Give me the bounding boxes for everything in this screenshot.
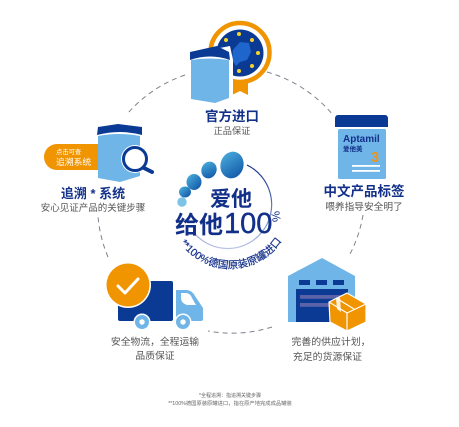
- text: genuine guarantee: 正品保证: [214, 125, 250, 136]
- text: curved claim: **100%德国原装原罐进口: [183, 237, 282, 270]
- text: percent sign: %: [268, 210, 284, 223]
- icon: footprint toes: [177, 149, 247, 207]
- heading: Chinese product label: 中文产品标签: [324, 183, 405, 199]
- icon: traceability can and magnifier: [97, 124, 152, 182]
- button: trace system: 追溯系统: [56, 156, 91, 167]
- icon: Aptamil can with Chinese label: 3: [371, 150, 379, 166]
- icon: Aptamil can with Chinese label: 爱他美: [343, 144, 363, 153]
- icon: warehouse with parcel: [288, 258, 366, 331]
- button: trace system: 点击可查: [56, 147, 82, 156]
- footnote: line two: **100%德国原装原罐进口，指在原产地完成成品罐装: [168, 399, 293, 407]
- icon: EU import medal and can: [189, 23, 270, 104]
- text: give him 100: 给他100: [175, 208, 272, 240]
- icon: delivery truck with check: [105, 262, 203, 330]
- text: quality guarantee: 品质保证: [135, 349, 175, 362]
- text: safe logistics: 安全物流，全程运输: [111, 335, 199, 348]
- heading: official import: 官方进口: [205, 108, 259, 124]
- dashed cycle ring: [98, 72, 363, 333]
- text: sufficient stock: 充足的货源保证: [293, 350, 362, 363]
- icon: Aptamil can with Chinese label: Aptamil: [343, 134, 380, 145]
- text: feeding guide: 喂养指导安全明了: [325, 200, 403, 213]
- text: supply plan: 完善的供应计划，: [291, 335, 371, 348]
- heading: traceability system: 追溯 * 系统: [61, 186, 125, 201]
- footnote: line one: *全程追溯：指追溯关键步骤: [199, 392, 261, 399]
- text: love him: 爱他: [210, 188, 252, 211]
- logo: central 100% footprint badge: [175, 152, 284, 270]
- icon: Aptamil can with Chinese label: [335, 115, 388, 179]
- button: trace system: [44, 144, 98, 170]
- text: traceability subtitle: 安心见证产品的关键步骤: [41, 202, 145, 214]
